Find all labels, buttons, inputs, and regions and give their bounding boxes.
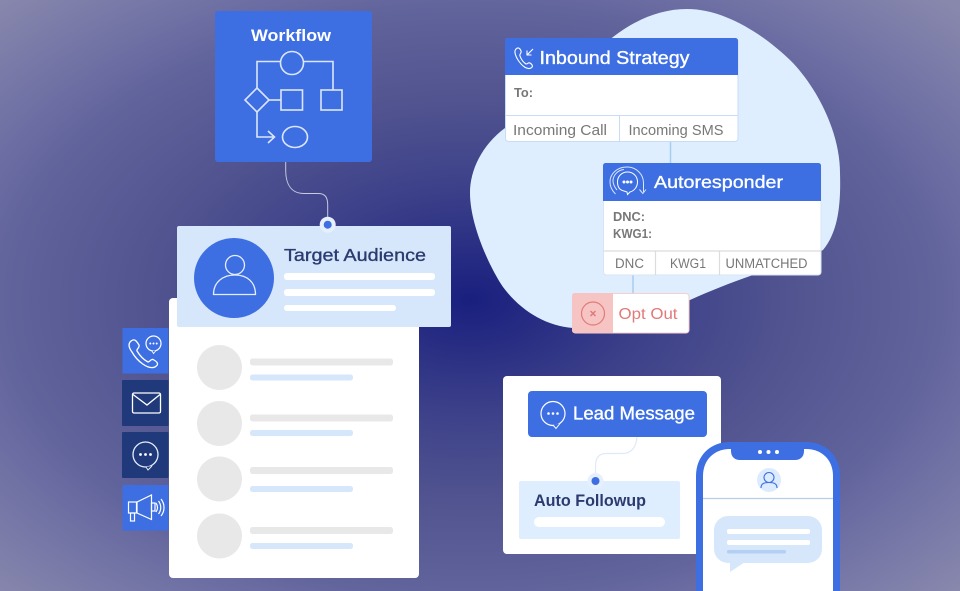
button: lead message: Lead Message [573, 402, 695, 424]
panel: inbound strategy: To: [514, 86, 533, 100]
cell: unmatched: UNMATCHED [726, 256, 808, 271]
connector dot [588, 473, 604, 489]
cell: incoming sms: Incoming SMS [628, 123, 724, 139]
icon: auto reply chat [610, 167, 646, 194]
icon: flowchart [245, 52, 342, 148]
panel: opt out [572, 293, 689, 333]
panel: autoresponder [603, 163, 821, 275]
connector: workflow to target audience [286, 162, 328, 218]
list row 4 [197, 514, 393, 558]
label: opt out: Opt Out [618, 306, 678, 323]
connector: inbound to autoresponder [670, 142, 672, 164]
panel: audience list [169, 298, 419, 578]
connector: lead message to auto followup [596, 437, 637, 476]
icon: cancel [582, 302, 604, 325]
panel: target audience [177, 226, 451, 327]
button: lead message [528, 391, 707, 437]
icon: incoming call [515, 48, 533, 69]
panel: autoresponder: KWG1: [613, 227, 652, 241]
box: auto followup: Auto Followup [534, 492, 646, 510]
cell: dnc: DNC [615, 256, 644, 271]
cell: incoming call: Incoming Call [513, 123, 607, 139]
phone mockup [696, 442, 840, 591]
icon: chat bubble [122, 432, 168, 478]
background blob [470, 9, 840, 328]
list row 1 [197, 345, 393, 390]
panel: inbound strategy [505, 38, 738, 142]
panel: autoresponder: DNC: [613, 210, 645, 224]
panel: workflow [215, 11, 372, 162]
icon: mail [122, 380, 168, 426]
cell: kwg1: KWG1 [670, 256, 706, 271]
heading: target audience: Target Audience [284, 245, 426, 265]
chat bubble [714, 516, 822, 572]
connector: autoresponder to opt out [632, 275, 634, 294]
panel: lead message [503, 376, 721, 554]
heading: inbound strategy: Inbound Strategy [540, 48, 690, 68]
icon: megaphone [122, 485, 168, 530]
connector dot [320, 217, 336, 233]
icon: contact avatar [757, 468, 781, 492]
list row 2 [197, 401, 393, 446]
icon: person [194, 238, 274, 318]
list row 3 [197, 456, 393, 502]
heading: autoresponder: Autoresponder [654, 172, 783, 192]
heading: workflow: Workflow [251, 26, 332, 45]
box: auto followup [519, 481, 680, 539]
icon: phone chat [122, 328, 168, 374]
